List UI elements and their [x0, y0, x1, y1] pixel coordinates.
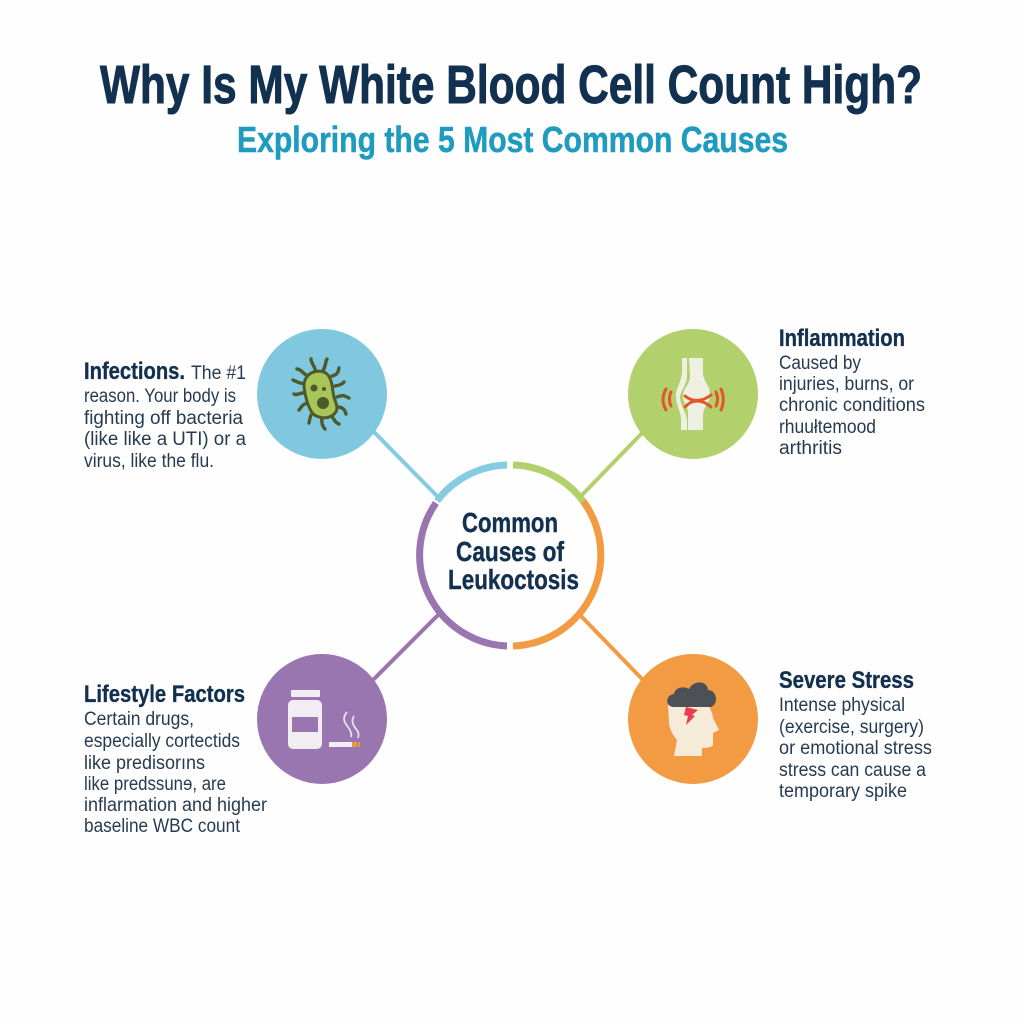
inflammation text: Caused by [779, 353, 861, 374]
icon: cigarette [329, 712, 360, 747]
infections text: The #1 [191, 363, 246, 384]
infections text: reason. Your body is [84, 386, 236, 407]
lifestyle text: inflarmation and higher [84, 795, 268, 816]
infections text: Infections. [84, 358, 185, 385]
inflammation text: injuries, burns, or [779, 374, 915, 395]
stress text [779, 667, 932, 802]
stress text: or emotional stress [779, 738, 932, 759]
lifestyle text: like predisorıns [84, 753, 205, 774]
stress text: Intense physical [779, 695, 905, 716]
lifestyle text [84, 681, 268, 837]
inflammation text: arthritis [779, 438, 842, 459]
lifestyle text: baseline WBC count [84, 816, 241, 837]
infections text: virus, like the flu. [84, 451, 214, 472]
stress text: Severe Stress [779, 667, 914, 694]
connector: inflammation [582, 432, 643, 495]
central hub [420, 465, 601, 646]
hub label: Causes of [456, 536, 565, 567]
subtitle: Exploring the 5 Most Common Causes [237, 119, 788, 160]
hub ring [420, 465, 601, 646]
infections text: fighting off bacteria [84, 408, 243, 429]
inflammation text [779, 325, 925, 459]
inflammation text: Inflammation [779, 325, 905, 352]
lifestyle text: especially cortectids [84, 731, 240, 752]
panel: severe stress [628, 654, 932, 802]
icon: inflamed joint [663, 358, 723, 430]
icon: head with storm cloud [667, 682, 719, 756]
inflammation text: rhuułtemood [779, 417, 876, 438]
stress text: (exercise, surgery) [779, 717, 924, 738]
icon circle: stress [628, 654, 758, 784]
inflammation text: chronic conditions [779, 395, 925, 416]
connector: infections [374, 432, 438, 497]
lifestyle text: Certain drugs, [84, 709, 194, 730]
infections text [84, 358, 246, 472]
hub label: Leukoctosis [448, 564, 579, 595]
icon circle: inflammation [628, 329, 758, 459]
lifestyle text: like predssunɘ, are [84, 774, 226, 795]
connector: stress [581, 616, 643, 680]
hub label: Common [462, 507, 558, 538]
icon: bacterium [293, 359, 349, 429]
icon circle: infections [257, 329, 387, 459]
panel: infections [84, 329, 387, 472]
panel: inflammation [628, 325, 925, 459]
panel: lifestyle factors [84, 654, 387, 837]
icon: pill bottle [288, 690, 322, 749]
stress text: temporary spike [779, 781, 907, 802]
connector: lifestyle [372, 615, 438, 681]
infections text: (like like a UTI) or a [84, 429, 246, 450]
icon circle: lifestyle [257, 654, 387, 784]
hub label [448, 507, 579, 595]
stress text: stress can cause a [779, 760, 926, 781]
lifestyle text: Lifestyle Factors [84, 681, 245, 708]
